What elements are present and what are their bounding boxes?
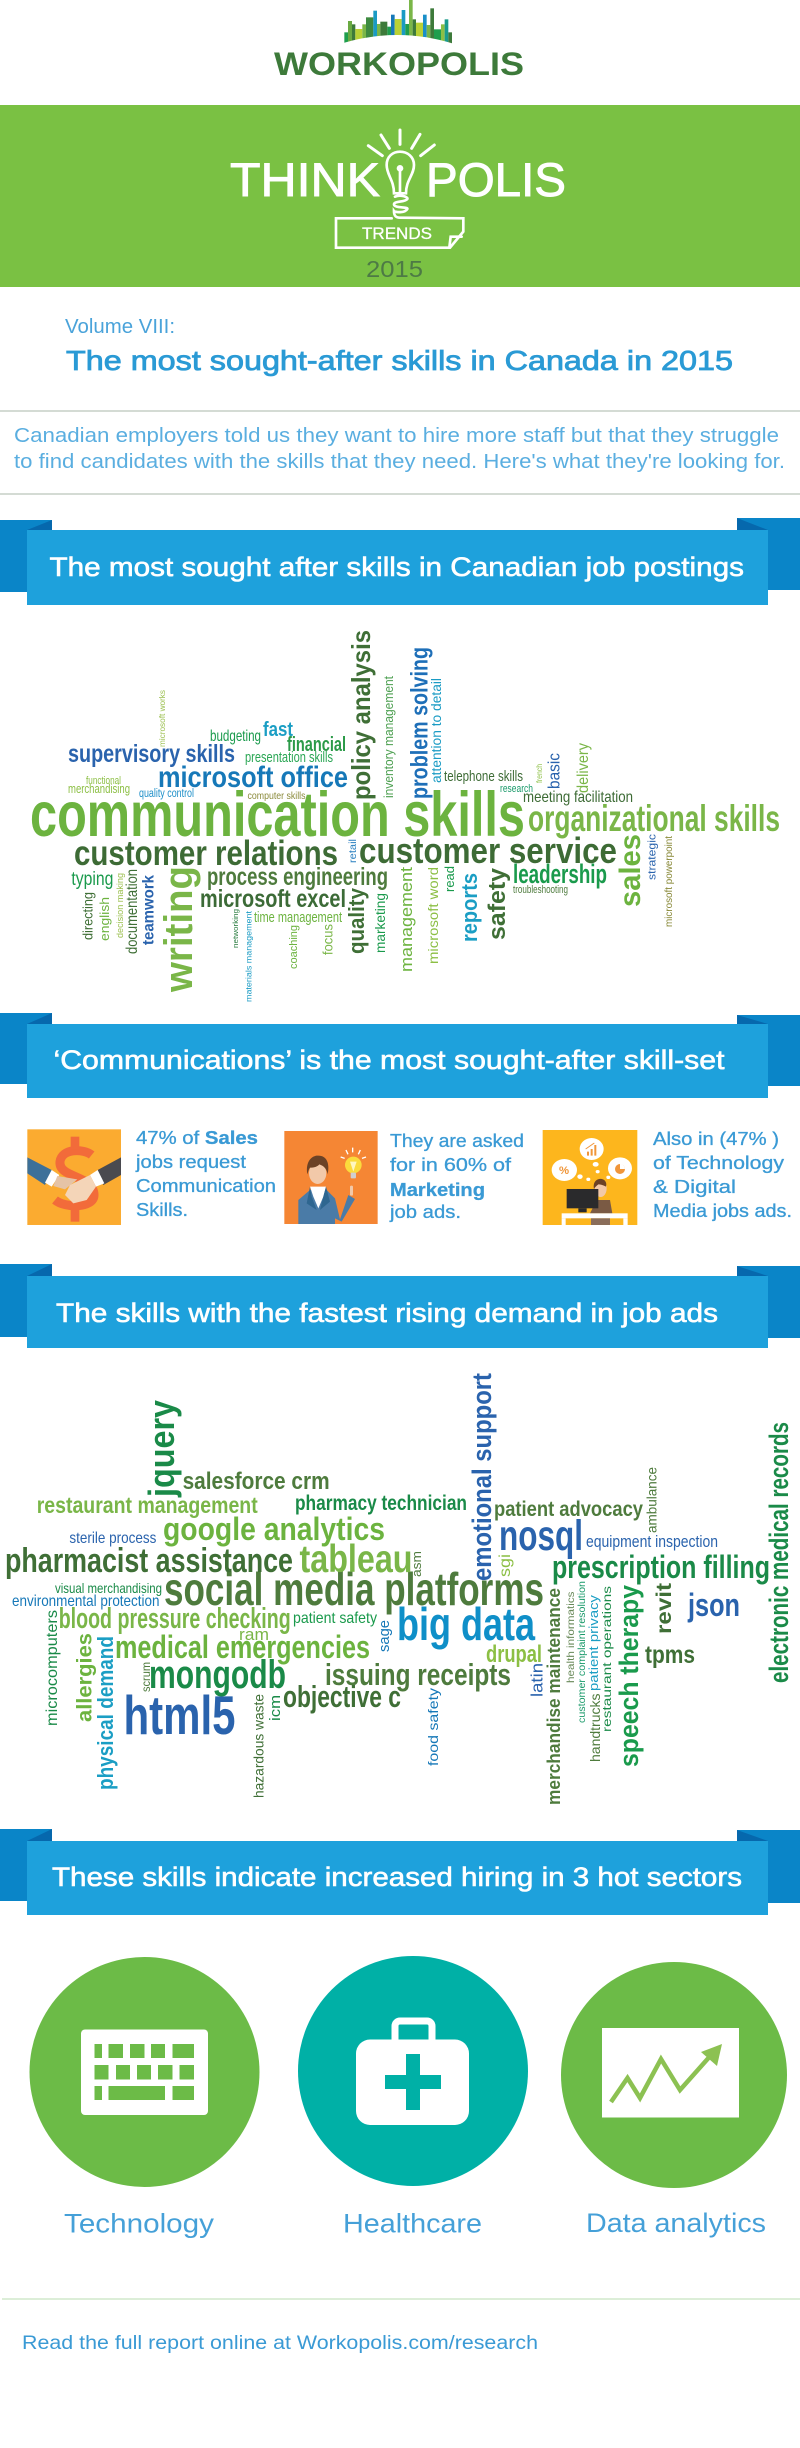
word cloud: most sought after skills: budgeting	[210, 728, 261, 745]
word cloud: fastest rising skills: health informatics	[565, 1592, 577, 1683]
word cloud: most sought after skills: computer skills	[248, 790, 306, 802]
word cloud: fastest rising skills: ambulance	[645, 1467, 660, 1533]
word cloud: fastest rising skills: blood pressure checking	[59, 1603, 291, 1635]
text: sales stat: Communication	[136, 1176, 276, 1196]
sector: technology	[30, 1957, 260, 2238]
word cloud: fastest rising skills	[5, 1373, 794, 1805]
word cloud: fastest rising skills: environmental protection	[12, 1593, 160, 1610]
banner: most sought after skills	[0, 518, 800, 605]
text: sales stat: 47% of Sales	[136, 1128, 258, 1148]
sector: data analytics	[561, 1962, 787, 2238]
word cloud: fastest rising skills: equipment inspection	[586, 1533, 718, 1551]
icon: handshake and dollar	[27, 1129, 121, 1225]
word cloud: most sought after skills: time management	[254, 910, 342, 926]
word cloud: fastest rising skills: restaurant management	[37, 1492, 258, 1518]
word cloud: fastest rising skills: jquery	[141, 1400, 182, 1498]
word cloud: fastest rising skills: asm	[409, 1551, 424, 1577]
word cloud: most sought after skills: troubleshooting	[513, 884, 568, 896]
word cloud: most sought after skills: research	[500, 783, 533, 795]
icon: person at computer with thought bubbles: %	[559, 1165, 569, 1177]
title block: Volume VIII:	[65, 316, 175, 338]
text: technology stat: of Technology	[653, 1153, 784, 1173]
banner: communications	[0, 1013, 800, 1098]
word cloud: fastest rising skills: customer complaint resolution	[577, 1581, 588, 1723]
label: Technology: Technology	[64, 2208, 215, 2238]
icon: skyline	[343, 0, 453, 50]
word cloud: fastest rising skills: patient safety	[293, 1610, 377, 1627]
word cloud: most sought after skills: merchandising	[68, 781, 130, 796]
word cloud: most sought after skills: inventory management	[381, 676, 396, 798]
word cloud: fastest rising skills: pharmacy technician	[295, 1492, 467, 1515]
word cloud: most sought after skills: management	[398, 867, 416, 972]
word cloud: fastest rising skills: microcomputers	[44, 1610, 61, 1726]
banner: hot sectors: These skills indicate increased hiring in 3 hot sectors	[52, 1862, 742, 1892]
word cloud: most sought after skills: strategic	[647, 833, 659, 880]
word cloud: most sought after skills: decision making	[115, 873, 126, 938]
text: marketing stat: for in 60% of	[390, 1155, 512, 1175]
word cloud: fastest rising skills: physical demand	[93, 1636, 118, 1790]
word cloud: most sought after skills: typing	[71, 869, 113, 890]
word cloud: most sought after skills: microsoft word	[426, 867, 441, 964]
word cloud: fastest rising skills: sgi	[497, 1554, 514, 1577]
word cloud: fastest rising skills: latin	[528, 1663, 546, 1697]
word cloud: most sought after skills: customer relations	[74, 834, 338, 873]
text: marketing stat	[389, 1131, 524, 1222]
word cloud: fastest rising skills: restaurant operations	[602, 1586, 614, 1732]
word cloud: fastest rising skills: patient advocacy	[494, 1498, 643, 1521]
word cloud: most sought after skills: meeting facilitation	[523, 789, 633, 806]
word cloud: most sought after skills: financial	[287, 734, 346, 756]
word cloud: most sought after skills: fast	[263, 719, 293, 741]
word cloud: fastest rising skills: visual merchandising	[55, 1580, 162, 1596]
text: Trends: TRENDS	[362, 224, 432, 243]
banner: fastest rising demand	[0, 1264, 800, 1348]
word cloud: most sought after skills: read	[442, 866, 457, 892]
word cloud: fastest rising skills: tpms	[645, 1641, 695, 1669]
word cloud: most sought after skills: french	[535, 764, 544, 783]
word cloud: most sought after skills: documentation	[124, 869, 141, 954]
word cloud: most sought after skills: focus	[320, 924, 336, 955]
word cloud: most sought after skills: microsoft office	[158, 761, 348, 794]
intro paragraph: Canadian employers told us they want to hire more staff but that they struggle	[14, 425, 779, 447]
word cloud: most sought after skills: quality	[344, 887, 369, 954]
title block	[65, 316, 733, 376]
intro paragraph: to find candidates with the skills that they need. Here's what they're looking for.	[14, 451, 785, 473]
label: Data analytics: Data analytics	[586, 2208, 766, 2238]
word cloud: fastest rising skills: icm	[267, 1695, 284, 1721]
logo wordmark: WORKOPOLIS	[274, 46, 524, 82]
word cloud: fastest rising skills: pharmacist assistance	[5, 1542, 293, 1580]
word cloud: fastest rising skills: emotional support	[467, 1373, 497, 1581]
icon: keyboard	[81, 2030, 208, 2115]
text: sales stat: jobs request	[135, 1152, 246, 1172]
word cloud: fastest rising skills: revit	[653, 1583, 676, 1634]
word cloud: most sought after skills: networking	[233, 909, 240, 948]
word cloud: most sought after skills: materials management	[244, 910, 254, 1002]
icon: person at computer with thought bubbles	[543, 1130, 637, 1225]
text: sales stat: Skills.	[136, 1200, 188, 1220]
text: technology stat: Also in (47% )	[653, 1129, 779, 1149]
word cloud: most sought after skills: sales	[614, 834, 647, 907]
word cloud: fastest rising skills: patient privacy	[587, 1594, 601, 1691]
word cloud: most sought after skills: marketing	[373, 893, 388, 953]
word cloud: most sought after skills: microsoft works	[158, 690, 167, 747]
word cloud: fastest rising skills: issuing receipts	[325, 1657, 511, 1692]
word cloud: fastest rising skills: hazardous waste	[250, 1694, 266, 1798]
word cloud: most sought after skills: attention to detail	[429, 678, 444, 783]
word cloud: fastest rising skills: food safety	[425, 1688, 441, 1766]
panel: sales stat	[27, 1128, 276, 1225]
word cloud: most sought after skills: directing	[80, 892, 96, 940]
word cloud: fastest rising skills: mongodb	[149, 1653, 286, 1697]
word cloud: fastest rising skills: handtrucks	[587, 1694, 603, 1762]
banner: most sought after skills: The most sought after skills in Canadian job postings	[50, 552, 744, 582]
icon: medical case	[356, 2021, 469, 2125]
intro paragraph	[14, 425, 785, 473]
panel: Thinkopolis header band	[0, 105, 800, 287]
word cloud: fastest rising skills: sage	[376, 1620, 393, 1652]
word cloud: fastest rising skills: merchandise maintenance	[544, 1588, 564, 1805]
banner: hot sectors	[0, 1829, 800, 1915]
word cloud: fastest rising skills: big data	[397, 1598, 535, 1650]
text: technology stat: Media jobs ads.	[653, 1201, 792, 1221]
word cloud: fastest rising skills: salesforce crm	[183, 1468, 330, 1495]
word cloud: most sought after skills: problem solving	[406, 647, 434, 799]
title block: The most sought-after skills in Canada in 2015	[66, 345, 733, 376]
word cloud: most sought after skills: customer service	[359, 830, 617, 871]
heading: Thinkopolis	[230, 153, 566, 206]
word cloud: most sought after skills: microsoft excel	[200, 885, 346, 913]
footer text: Read the full report online at Workopolis.com/research	[22, 2333, 538, 2354]
logo: Workopolis	[274, 0, 524, 82]
word cloud: most sought after skills: communication skills	[30, 780, 525, 850]
word cloud: most sought after skills: functional	[86, 775, 121, 787]
label: Healthcare: Healthcare	[343, 2208, 482, 2238]
word cloud: most sought after skills: coaching	[288, 925, 300, 969]
word cloud: fastest rising skills: medical emergencies	[115, 1629, 370, 1665]
word cloud: most sought after skills: leadership	[513, 859, 607, 889]
sector: healthcare	[298, 1956, 528, 2238]
text: technology stat: & Digital	[653, 1177, 736, 1197]
word cloud: fastest rising skills: google analytics	[163, 1511, 385, 1547]
word cloud: most sought after skills: presentation skills	[245, 749, 333, 766]
word cloud: fastest rising skills: scrum	[139, 1662, 153, 1692]
word cloud: most sought after skills	[30, 630, 780, 1002]
word cloud: most sought after skills: quality control	[139, 788, 194, 800]
text: marketing stat: job ads.	[389, 1202, 461, 1222]
word cloud: most sought after skills: basic	[544, 753, 564, 789]
word cloud: fastest rising skills: speech therapy	[614, 1585, 644, 1767]
word cloud: fastest rising skills: drupal	[486, 1641, 542, 1668]
icon: person with light bulb	[284, 1131, 378, 1224]
panel: technology stat	[543, 1129, 792, 1225]
text: marketing stat: Marketing	[390, 1180, 485, 1200]
word cloud: fastest rising skills: social media platforms	[164, 1563, 544, 1615]
word cloud: most sought after skills: microsoft powerpoint	[664, 836, 675, 927]
word cloud: fastest rising skills: tableau	[300, 1538, 412, 1581]
word cloud: most sought after skills: writing	[157, 866, 201, 993]
word cloud: most sought after skills: delivery	[575, 743, 592, 793]
word cloud: most sought after skills: teamwork	[140, 875, 158, 945]
word cloud: fastest rising skills: sterile process	[69, 1530, 156, 1547]
word cloud: most sought after skills: process engineering	[207, 863, 388, 891]
word cloud: fastest rising skills: electronic medical records	[764, 1422, 794, 1683]
word cloud: fastest rising skills: json	[687, 1587, 740, 1623]
word cloud: most sought after skills: english	[97, 897, 112, 941]
word cloud: most sought after skills: retail	[348, 839, 359, 863]
word cloud: most sought after skills: safety	[484, 867, 511, 940]
word cloud: fastest rising skills: html5	[124, 1684, 236, 1746]
word cloud: most sought after skills: reports	[457, 873, 482, 942]
panel: marketing stat	[284, 1131, 524, 1224]
word cloud: most sought after skills: policy analysis	[346, 630, 376, 800]
banner: fastest rising demand: The skills with the fastest rising demand in job ads	[56, 1298, 718, 1328]
word cloud: most sought after skills: supervisory skills	[68, 740, 235, 768]
word cloud: fastest rising skills: allergies	[74, 1633, 96, 1722]
banner: communications: ‘Communications’ is the most sought-after skill-set	[54, 1045, 725, 1075]
word cloud: fastest rising skills: nosql	[499, 1512, 583, 1560]
icon: rising chart	[602, 2028, 739, 2118]
text: sales stat	[135, 1128, 276, 1220]
word cloud: fastest rising skills: ram	[239, 1625, 269, 1644]
word cloud: most sought after skills: telephone skills	[444, 768, 523, 785]
text: marketing stat: They are asked	[390, 1131, 524, 1151]
icon: light bulb with note	[336, 130, 463, 248]
heading: Thinkopolis: POLIS	[426, 153, 566, 206]
heading: Thinkopolis: THINK	[230, 153, 380, 206]
word cloud: fastest rising skills: objective c	[283, 1679, 401, 1714]
text: year: 2015	[366, 256, 423, 282]
text: technology stat	[653, 1129, 792, 1221]
